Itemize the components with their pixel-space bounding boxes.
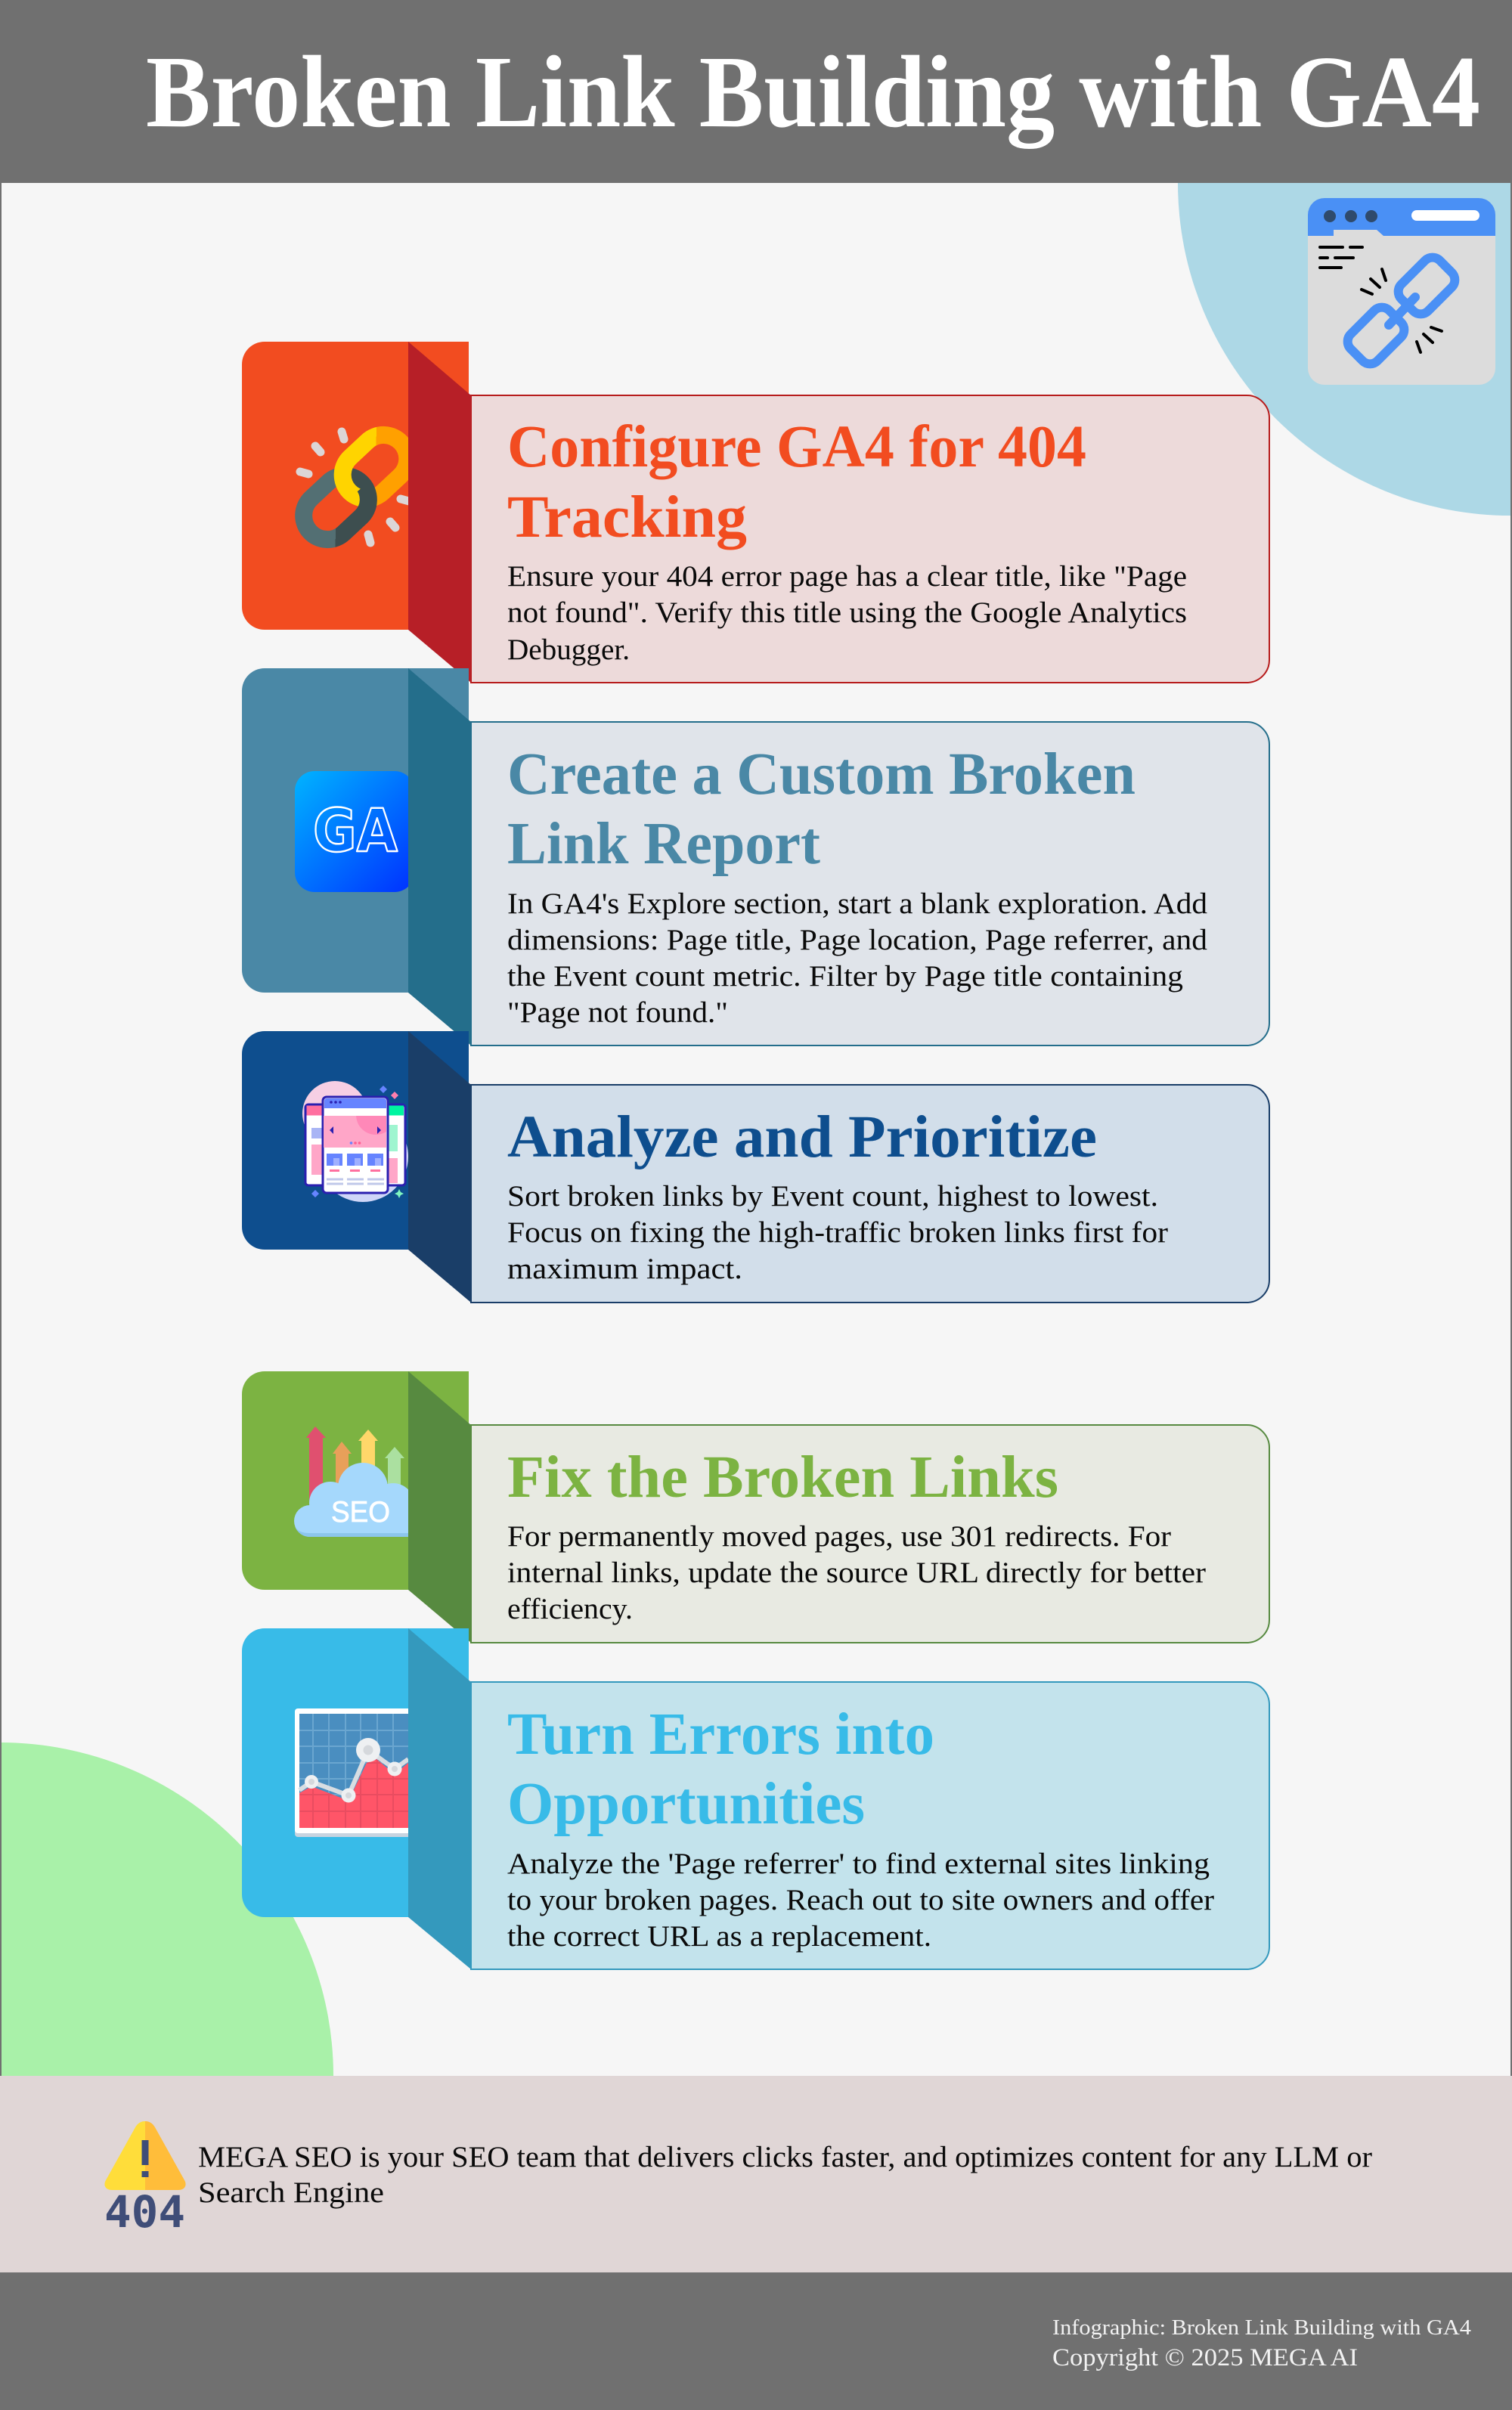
icon: SEO cloud with arrows: SEO bbox=[331, 1496, 390, 1529]
step 3 bbox=[242, 1031, 1269, 1303]
fold: step 3 bbox=[408, 1031, 471, 1303]
tile: step 5 bbox=[242, 1628, 469, 1917]
step 4 bbox=[242, 1371, 1269, 1643]
panel: configure GA4 bbox=[471, 395, 1269, 683]
body text: step 5: Analyze the 'Page referrer' to find external sites linking bbox=[507, 1848, 1210, 1880]
heading: step 5: Turn Errors into bbox=[507, 1702, 934, 1767]
footer text: Infographic: Broken Link Building with GA4 bbox=[1052, 2316, 1472, 2340]
heading: step 1: Configure GA4 for 404 bbox=[507, 414, 1086, 480]
decorative circle: bottom left bbox=[0, 1742, 333, 2076]
panel: custom report bbox=[471, 722, 1269, 1045]
body text: step 3: maximum impact. bbox=[507, 1253, 742, 1285]
body text: step 2: "Page not found." bbox=[507, 996, 728, 1029]
icon: SEO cloud with arrows bbox=[294, 1426, 422, 1537]
tile: step 3 bbox=[242, 1031, 469, 1250]
body text: step 5: to your broken pages. Reach out to site owners and offer bbox=[507, 1884, 1214, 1916]
heading: step 3: Analyze and Prioritize bbox=[507, 1104, 1097, 1170]
fold: step 2 bbox=[408, 668, 471, 1045]
icon: 404 warning: 404 bbox=[104, 2186, 185, 2238]
body text: step 3: Focus on fixing the high-traffic broken links first for bbox=[507, 1216, 1168, 1249]
icon: 404 warning bbox=[104, 2121, 186, 2238]
body text: step 4: For permanently moved pages, use 301 redirects. For bbox=[507, 1520, 1171, 1553]
body text: step 1: not found". Verify this title using the Google Analytics bbox=[507, 596, 1187, 629]
promo text: Search Engine bbox=[198, 2176, 384, 2209]
body text: step 1: Ensure your 404 error page has a clear title, like "Page bbox=[507, 560, 1187, 593]
fold: step 1 bbox=[408, 342, 471, 683]
body text: step 2: In GA4's Explore section, start a blank exploration. Add bbox=[507, 887, 1208, 920]
heading: step 4: Fix the Broken Links bbox=[507, 1445, 1058, 1510]
tile: step 4 bbox=[242, 1371, 469, 1590]
icon: GA badge bbox=[295, 771, 414, 892]
icon: broken link browser window bbox=[1308, 198, 1495, 385]
header band bbox=[0, 0, 1512, 183]
body text: step 4: efficiency. bbox=[507, 1593, 633, 1625]
icon: chain link bbox=[294, 425, 417, 550]
tile: step 2 bbox=[242, 668, 469, 993]
heading: step 2: Create a Custom Broken bbox=[507, 742, 1136, 807]
footer band bbox=[0, 2272, 1512, 2410]
fold: step 5 bbox=[408, 1628, 471, 1969]
body text: step 1: Debugger. bbox=[507, 633, 630, 666]
fold: step 4 bbox=[408, 1371, 471, 1643]
promo text: MEGA SEO is your SEO team that delivers clicks faster, and optimizes content for any LLM or bbox=[198, 2141, 1372, 2173]
panel: fix links bbox=[471, 1425, 1269, 1643]
icon: line chart bbox=[295, 1708, 416, 1837]
step 1 bbox=[242, 342, 1269, 683]
body text: step 2: dimensions: Page title, Page location, Page referrer, and bbox=[507, 924, 1208, 956]
tile: step 1 bbox=[242, 342, 469, 630]
body text: step 4: internal links, update the source URL directly for better bbox=[507, 1557, 1206, 1589]
heading: step 2: Link Report bbox=[507, 811, 820, 877]
body text: step 3: Sort broken links by Event count, highest to lowest. bbox=[507, 1180, 1158, 1213]
footer text: Copyright © 2025 MEGA AI bbox=[1052, 2344, 1358, 2371]
heading: step 5: Opportunities bbox=[507, 1771, 865, 1837]
panel: opportunities bbox=[471, 1682, 1269, 1969]
step 2 bbox=[242, 668, 1269, 1045]
decorative circle: top right bbox=[1178, 183, 1512, 516]
heading: step 1: Tracking bbox=[507, 485, 747, 550]
icon: GA badge: GA bbox=[313, 798, 398, 866]
body text: step 5: the correct URL as a replacement. bbox=[507, 1920, 931, 1953]
call to action band bbox=[0, 2076, 1512, 2272]
panel: analyze bbox=[471, 1085, 1269, 1303]
body text: step 2: the Event count metric. Filter by Page title containing bbox=[507, 960, 1183, 993]
step 5 bbox=[242, 1628, 1269, 1969]
icon: web pages bbox=[302, 1081, 408, 1202]
